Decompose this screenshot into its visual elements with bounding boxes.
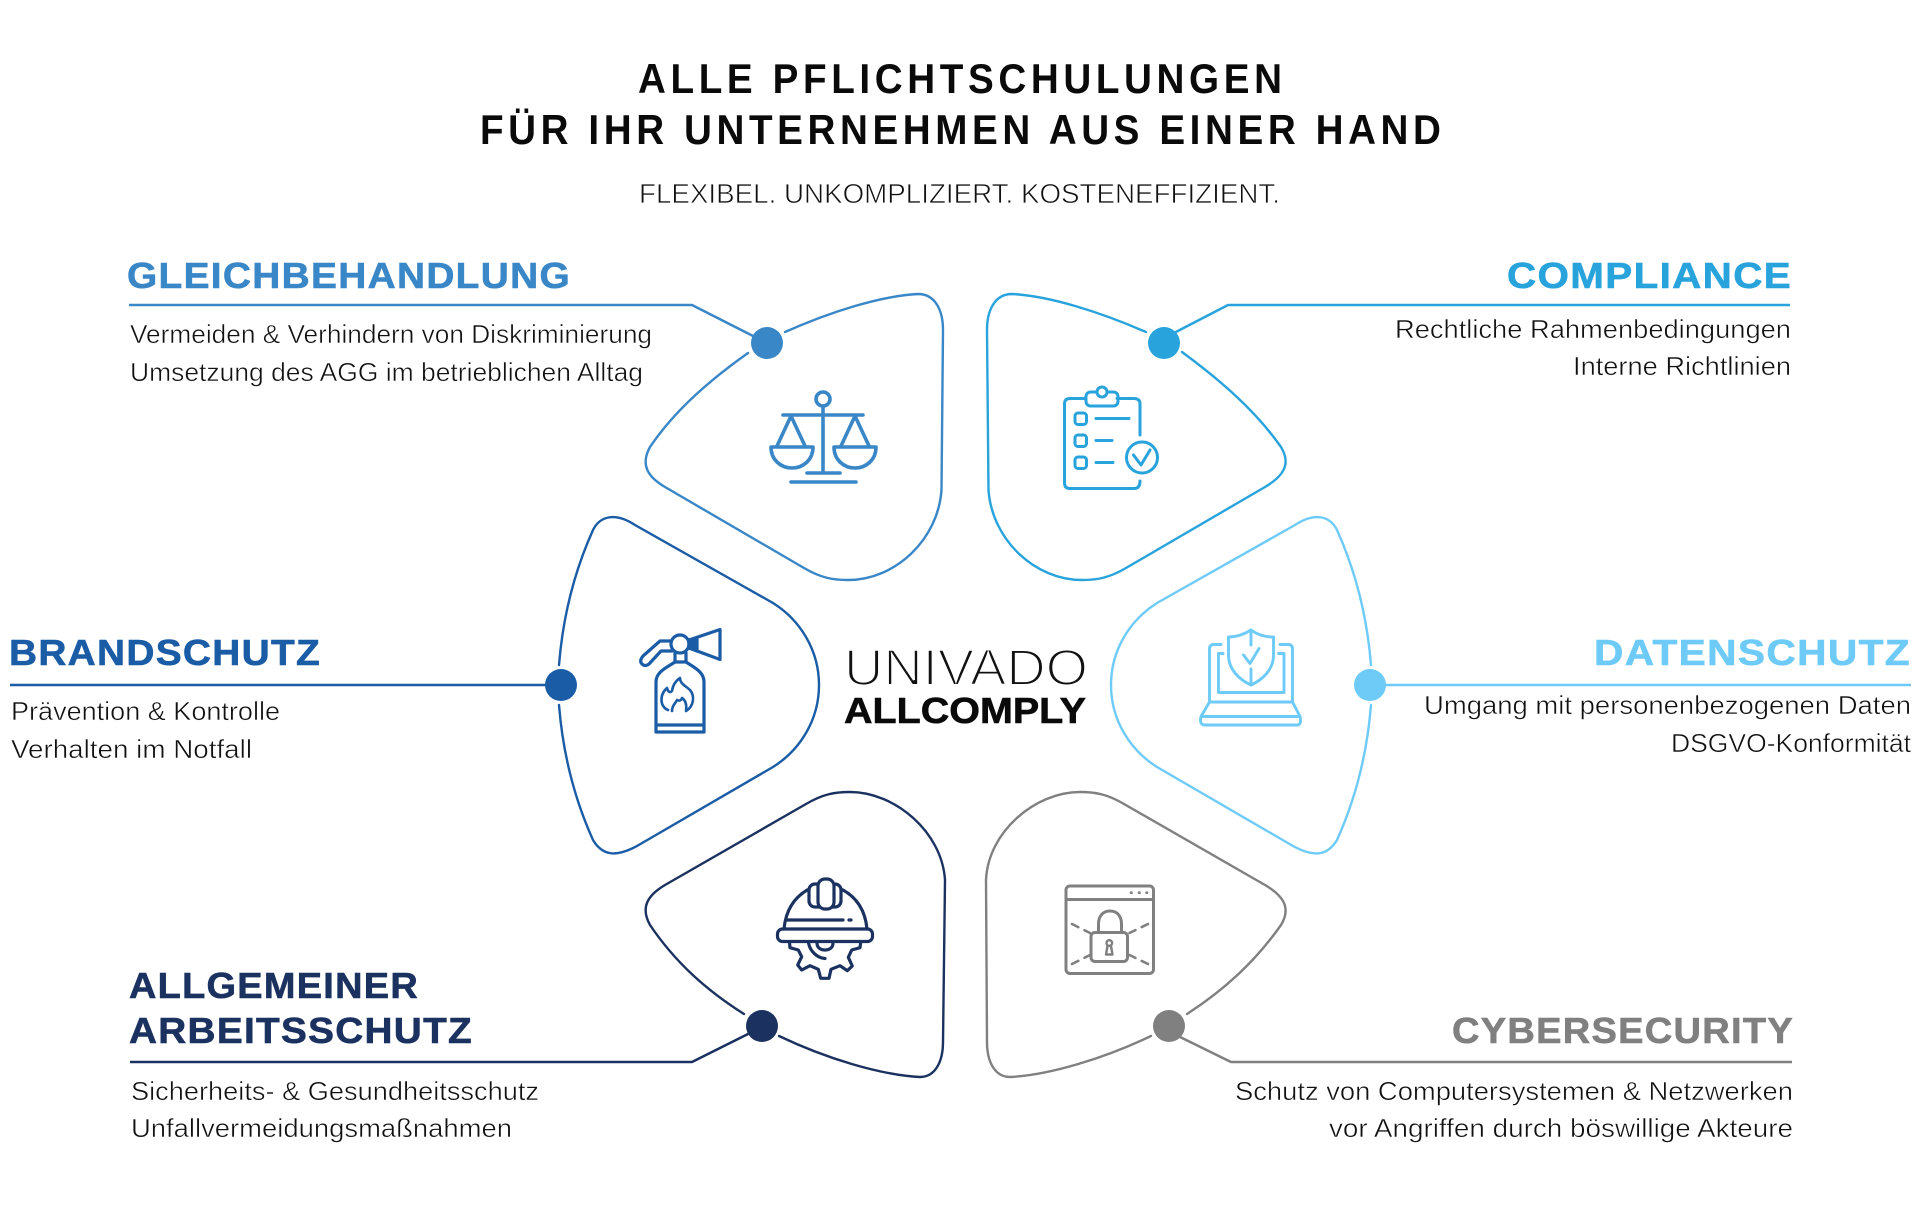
icon: clipboard checklist [1064, 387, 1158, 488]
connector dot [1148, 327, 1180, 359]
leader line [1380, 684, 1911, 686]
text: Compliance description: Rechtliche Rahmenbedingungen [1395, 314, 1791, 344]
text: Datenschutz description: Umgang mit personenbezogenen Daten [1424, 690, 1911, 720]
petal outline [646, 294, 943, 580]
icon: laptop with shield [1200, 630, 1301, 725]
panel: Allgemeiner Arbeitsschutz [129, 792, 945, 1143]
icon: helmet and gear [778, 879, 872, 978]
petal outline [986, 792, 1286, 1077]
petal outline [559, 517, 819, 853]
petal outline [1111, 517, 1371, 853]
text: Datenschutz description: DSGVO-Konformität [1671, 728, 1912, 758]
heading: Cybersecurity: CYBERSECURITY [1452, 1010, 1794, 1051]
heading: Allgemeiner Arbeitsschutz [129, 965, 473, 1051]
petal outline [987, 294, 1286, 580]
connector dot [545, 669, 577, 701]
heading: Brandschutz: BRANDSCHUTZ [9, 632, 321, 673]
leader line [1178, 1036, 1792, 1062]
icon: scales [771, 392, 876, 482]
title: FÜR IHR UNTERNEHMEN AUS EINER HAND [480, 105, 1441, 153]
text: Gleichbehandlung description: Umsetzung des AGG im betrieblichen Alltag [130, 357, 643, 387]
connector dot [746, 1010, 778, 1042]
text: Datenschutz description [1424, 690, 1912, 758]
title: ALLE PFLICHTSCHULUNGEN [638, 54, 1282, 102]
panel: Gleichbehandlung [127, 255, 943, 580]
text: Compliance description [1395, 314, 1791, 381]
panel: Brandschutz [9, 517, 819, 853]
heading: Allgemeiner Arbeitsschutz: ARBEITSSCHUTZ [129, 1010, 473, 1051]
panel: Datenschutz [1111, 517, 1912, 853]
heading: Datenschutz: DATENSCHUTZ [1594, 632, 1911, 673]
text: Cybersecurity description [1235, 1076, 1793, 1143]
text: Arbeitsschutz description [131, 1076, 539, 1143]
icon: browser window with lock [1066, 886, 1154, 974]
text: Brandschutz description: Prävention & Kontrolle [11, 696, 280, 726]
text: Gleichbehandlung description: Vermeiden & Verhindern von Diskriminierung [130, 319, 652, 349]
heading: Compliance: COMPLIANCE [1507, 255, 1792, 296]
heading: Allgemeiner Arbeitsschutz: ALLGEMEINER [129, 965, 419, 1006]
text: Gleichbehandlung description [130, 319, 652, 387]
icon: fire extinguisher [641, 630, 720, 732]
center logo [844, 639, 1088, 731]
leader line [10, 684, 550, 686]
connector dot [1354, 669, 1386, 701]
leader line [130, 1032, 752, 1062]
petal outline [646, 792, 945, 1077]
heading: Gleichbehandlung: GLEICHBEHANDLUNG [127, 255, 571, 296]
text: Brandschutz description: Verhalten im Notfall [11, 734, 252, 764]
text: Brandschutz description [11, 696, 280, 764]
panel: Cybersecurity [986, 792, 1794, 1143]
text: Compliance description: Interne Richtlinien [1573, 351, 1791, 381]
title [480, 54, 1441, 153]
center logo: ALLCOMPLY [844, 690, 1086, 731]
panel: Compliance [987, 255, 1792, 580]
text: Arbeitsschutz description: Sicherheits- & Gesundheitsschutz [131, 1076, 539, 1106]
leader line [129, 305, 755, 337]
connector dot [1153, 1010, 1185, 1042]
subtitle: FLEXIBEL. UNKOMPLIZIERT. KOSTENEFFIZIENT. [639, 178, 1280, 209]
text: Arbeitsschutz description: Unfallvermeidungsmaßnahmen [131, 1113, 512, 1143]
text: Cybersecurity description: Schutz von Computersystemen & Netzwerken [1235, 1076, 1793, 1106]
text: Cybersecurity description: vor Angriffen durch böswillige Akteure [1329, 1113, 1793, 1143]
leader line [1172, 305, 1790, 334]
center logo: UNIVADO [844, 639, 1088, 696]
connector dot [751, 327, 783, 359]
